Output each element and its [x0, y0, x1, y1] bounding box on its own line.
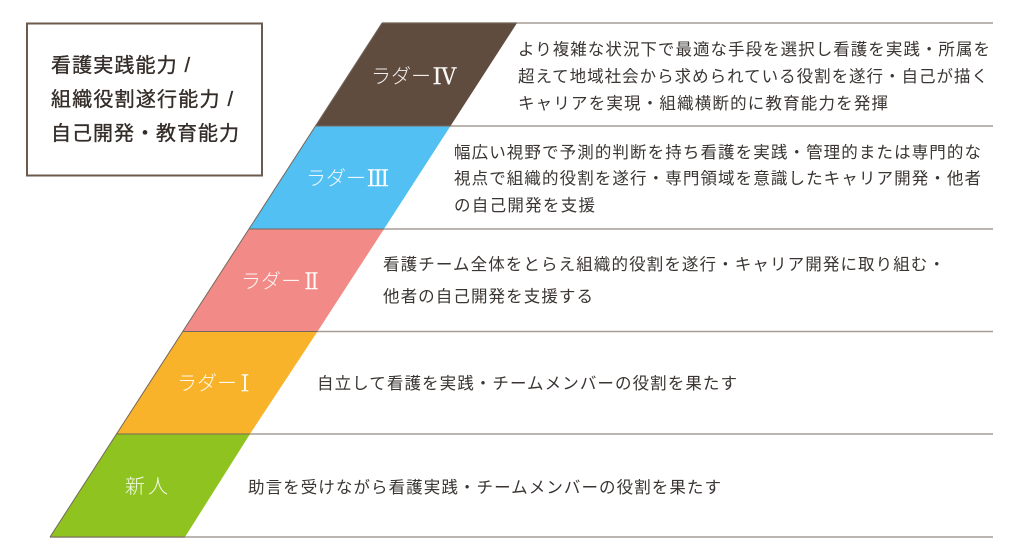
- text block: Ladder IV description: [518, 40, 990, 113]
- ladder step: Ladder II: [182, 229, 384, 332]
- heading: competency categories: 自己開発・教育能力: [51, 122, 239, 145]
- ladder step: Ladder III: [249, 126, 450, 229]
- ladder step: Ladder II: ラダー: [241, 270, 301, 293]
- heading: competency categories: 看護実践能力 /: [51, 54, 190, 77]
- ladder step: Ladder IV: [316, 23, 517, 126]
- text block: Ladder II description: 看護チーム全体をとらえ組織的役割を遂行・キャリア開発に取り組む・: [383, 255, 945, 274]
- text block: Ladder II description: 他者の自己開発を支援する: [383, 287, 593, 306]
- text block: Newcomer description: 助言を受けながら看護実践・チームメンバーの役割を果たす: [248, 478, 721, 497]
- ladder step: Ladder I: [116, 332, 318, 434]
- text block: Ladder I description: 自立して看護を実践・チームメンバーの役割を果たす: [317, 374, 737, 393]
- text block: Ladder III description: 視点で組織的役割を遂行・専門領域を意識したキャリア開発・他者: [454, 169, 981, 188]
- text block: Ladder II description: [383, 255, 945, 306]
- ladder step: Ladder III: ラダー: [306, 167, 366, 190]
- ladder step: Ladder I: ラダー: [177, 372, 237, 395]
- text block: Ladder IV description: キャリアを実現・組織横断的に教育能力を発揮: [518, 94, 888, 113]
- ladder step: Newcomer: 新人: [125, 475, 168, 498]
- ladder step: Newcomer: [50, 434, 250, 537]
- ladder step: Ladder III: Ⅲ: [367, 162, 389, 193]
- text block: Ladder IV description: より複雑な状況下で最適な手段を選択し看護を実践・所属を: [518, 40, 990, 59]
- ladder step: Ladder IV: ラダー: [371, 65, 431, 88]
- heading: competency categories: 組織役割遂行能力 /: [51, 88, 233, 111]
- text block: Ladder IV description: 超えて地域社会から求められている役割を遂行・自己が描く: [518, 67, 988, 86]
- text block: Ladder III description: の自己開発を支援: [454, 196, 595, 215]
- ladder step: Ladder IV: Ⅳ: [433, 60, 457, 91]
- text block: Ladder III description: 幅広い視野で予測的判断を持ち看護を実践・管理的または専門的な: [454, 143, 981, 162]
- text block: Ladder III description: [454, 143, 981, 215]
- panel: competency title box: [27, 24, 262, 176]
- heading: competency categories: [51, 54, 239, 145]
- ladder step: Ladder II: Ⅱ: [302, 265, 321, 296]
- ladder step: Ladder I: Ⅰ: [236, 367, 254, 398]
